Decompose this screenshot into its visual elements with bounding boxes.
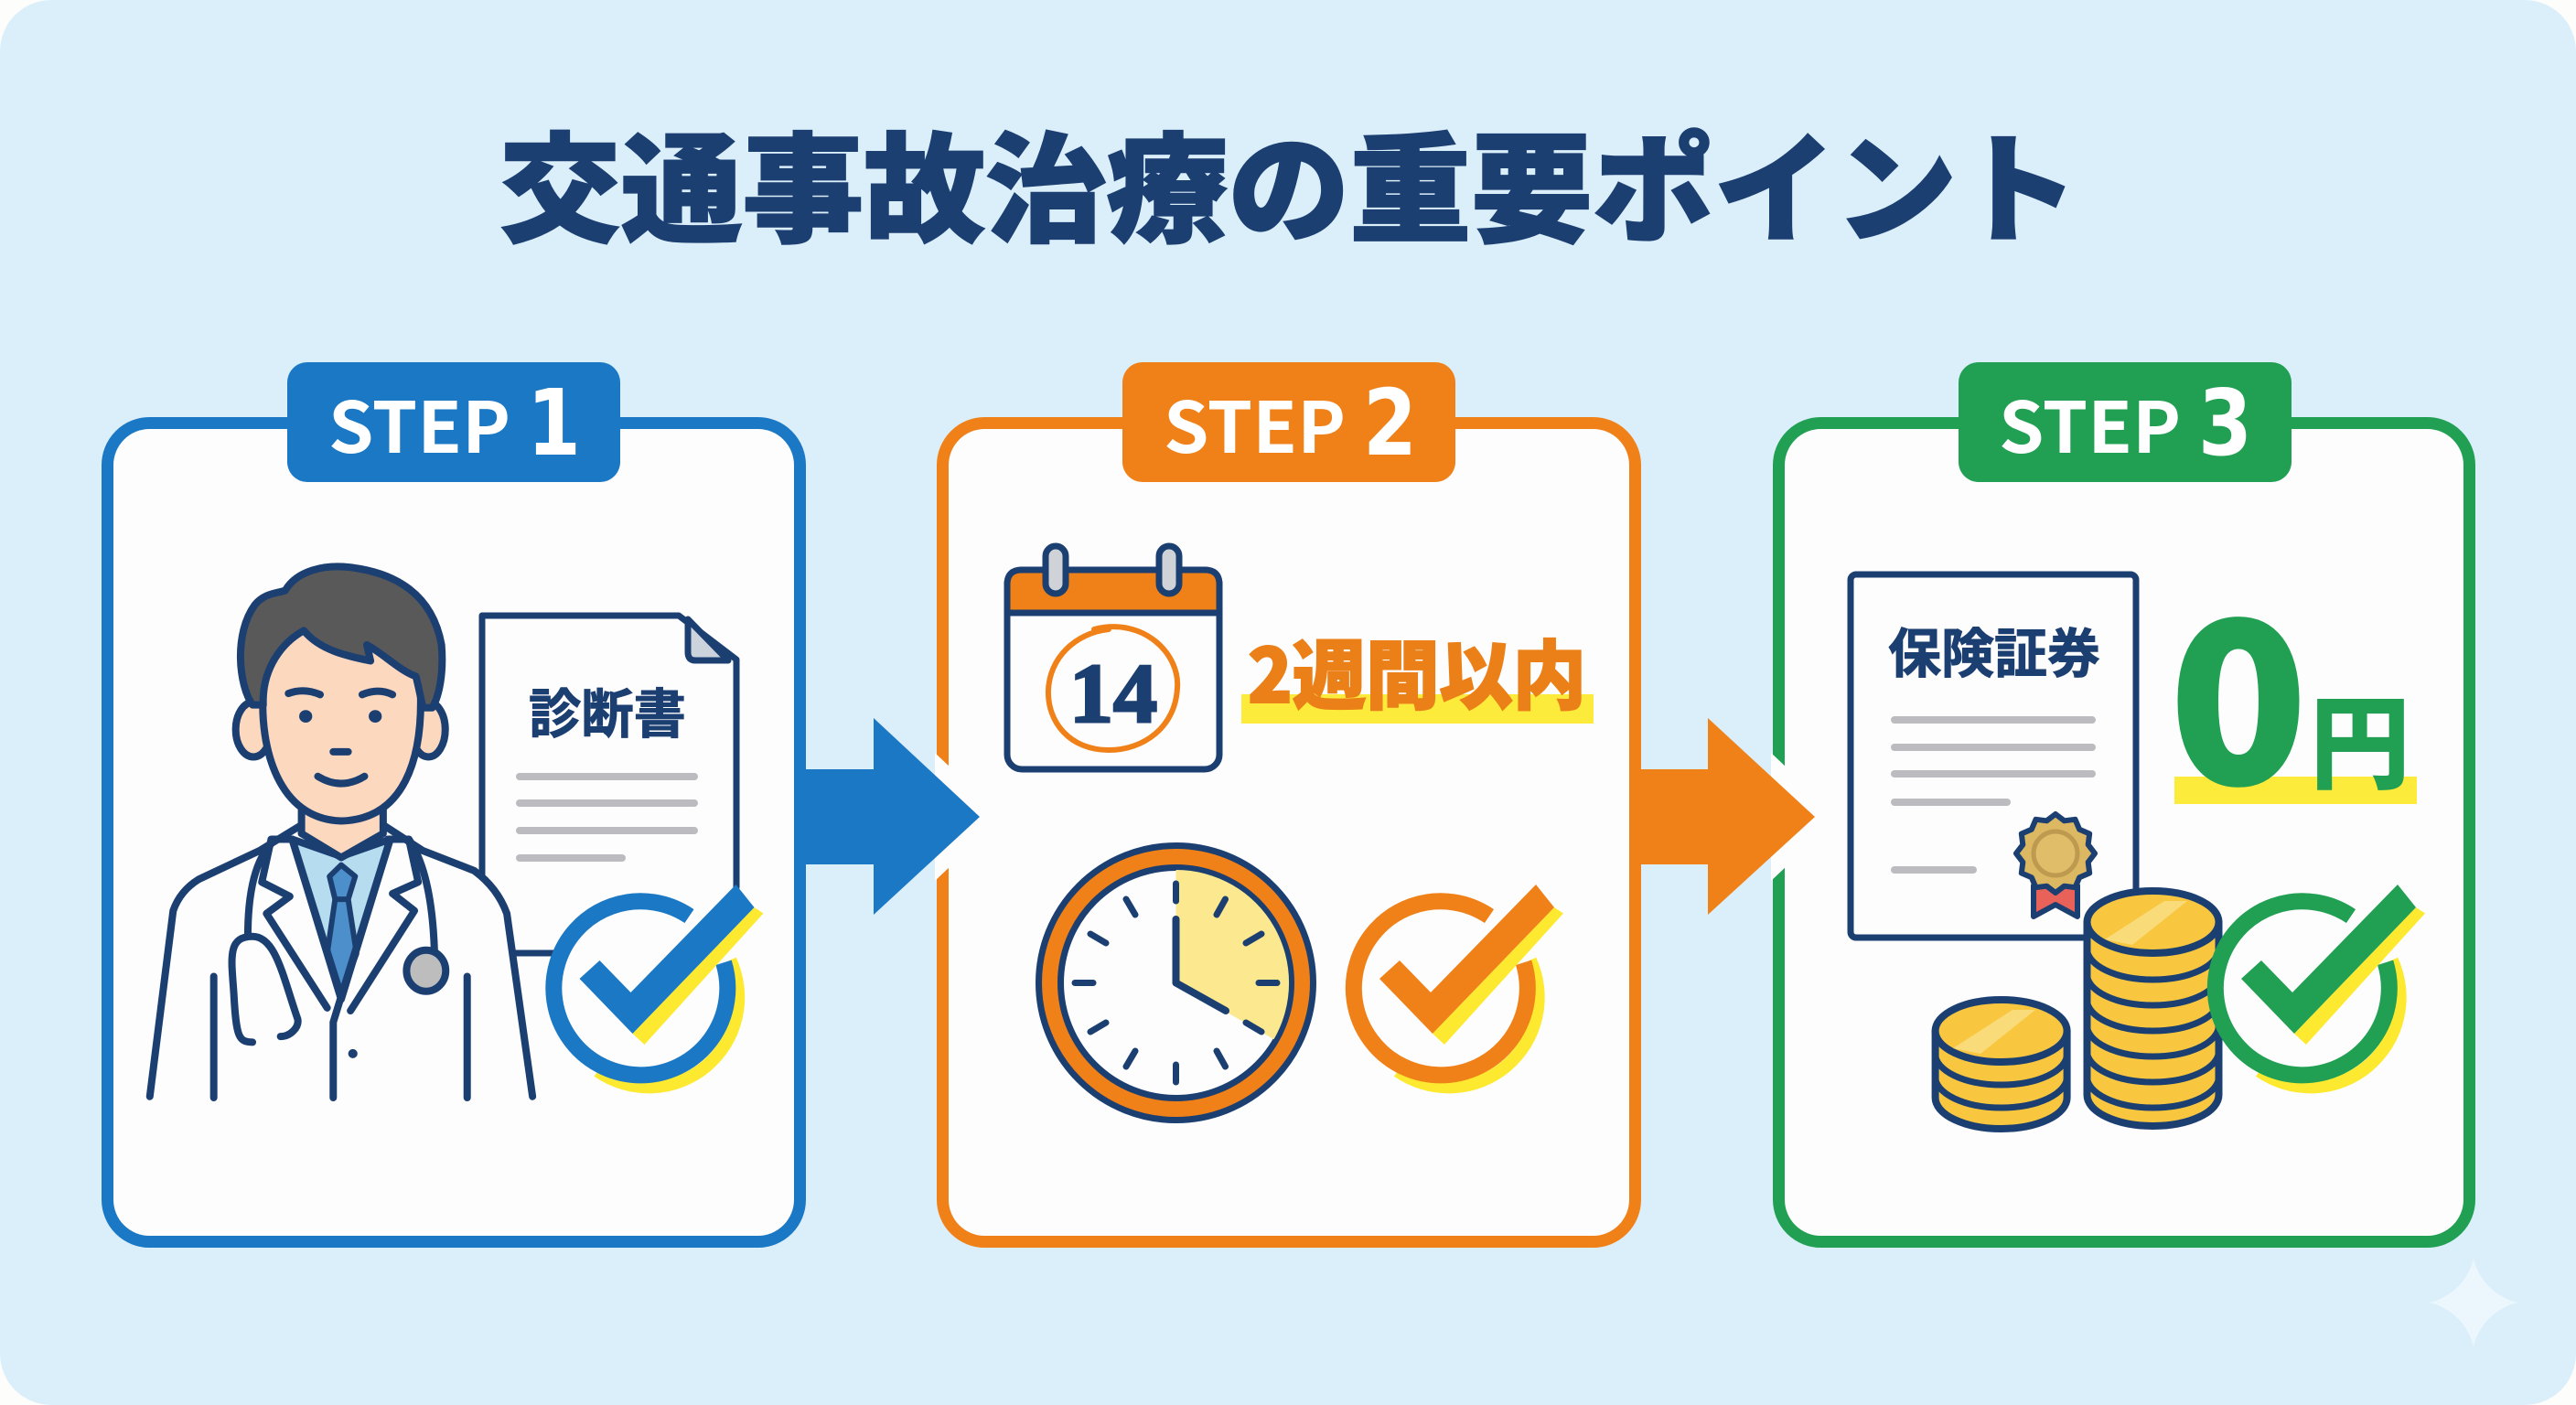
step 1 badge: STEP <box>328 372 510 474</box>
card: step 1 frame <box>108 423 800 1242</box>
icon: calendar <box>1007 546 1219 769</box>
title: 交通事故治療の重要ポイント <box>499 95 2078 267</box>
callout: zero yen <box>2170 531 2417 846</box>
icon: small coin stack <box>1936 1000 2067 1129</box>
arrow: step 2 to step 3 <box>1629 718 1815 915</box>
card: step 3 frame <box>1778 423 2470 1242</box>
icon: check mark orange <box>1352 885 1563 1087</box>
icon: doctor <box>150 566 532 1098</box>
step 1 badge: 1 <box>527 370 581 477</box>
arrow: step 1 to step 2 <box>794 718 980 915</box>
icon: clock <box>1039 845 1314 1120</box>
icon: diagnosis document <box>482 616 736 953</box>
seal <box>2016 814 2095 893</box>
icon: insurance certificate <box>1851 574 2136 938</box>
panel: step 3 <box>1778 362 2470 1242</box>
step 2 badge: 2 <box>1363 370 1417 477</box>
step 2 badge: STEP <box>1164 372 1346 474</box>
icon: tall coin stack <box>2088 891 2219 1126</box>
step 3 badge <box>1959 362 2292 482</box>
certificate label: 保険証券 <box>1888 611 2100 688</box>
icon: sparkle <box>2430 1259 2517 1346</box>
callout: zero yen: 円 <box>2310 662 2410 810</box>
step 1 badge <box>287 362 620 482</box>
seal ribbon <box>2034 885 2077 917</box>
icon: check mark blue <box>553 885 763 1087</box>
panel: step 1 <box>108 362 800 1242</box>
icon: check mark green <box>2214 885 2425 1087</box>
date number: 14 <box>1069 647 1157 740</box>
document label: 診断書 <box>529 671 686 748</box>
card: step 2 frame <box>942 423 1636 1242</box>
step 3 badge: STEP <box>1999 372 2181 474</box>
step 2 badge <box>1122 362 1455 482</box>
callout: within two weeks: 2週間以内 <box>1248 616 1586 724</box>
step 3 badge: 3 <box>2198 370 2252 477</box>
callout: zero yen: 0 <box>2170 531 2307 846</box>
panel: step 2 <box>942 362 1636 1242</box>
